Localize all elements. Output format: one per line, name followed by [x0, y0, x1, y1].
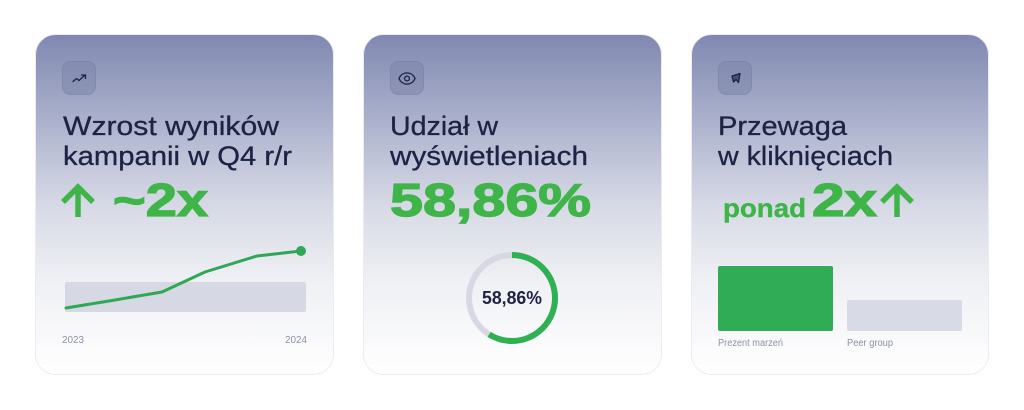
panel: impression share — [364, 34, 662, 374]
advantage value: 2x — [812, 174, 878, 226]
bar: Peer group — [847, 300, 962, 331]
advantage value — [723, 174, 878, 226]
icon: up arrow — [63, 187, 93, 217]
card background — [692, 34, 988, 374]
heading: Udział w — [390, 111, 499, 141]
card background — [364, 34, 662, 374]
share value: 58,86% — [390, 174, 591, 226]
heading: Przewaga — [718, 111, 847, 141]
label: Prezent marzeń: Prezent marzeń — [718, 338, 783, 349]
icon: trending up — [62, 62, 96, 94]
label: 2023: 2023 — [62, 335, 84, 346]
label: Peer group: Peer group — [847, 338, 893, 349]
donut chart — [469, 255, 555, 341]
growth value: ~2x — [113, 174, 209, 226]
heading: w kliknięciach — [717, 141, 893, 171]
icon: rocket — [718, 62, 752, 94]
line chart — [65, 246, 306, 312]
card background — [36, 34, 334, 374]
bar: Prezent marzeń — [718, 266, 833, 331]
heading: kampanii w Q4 r/r — [63, 141, 292, 171]
panel: click advantage — [692, 34, 988, 374]
advantage value: ponad — [723, 193, 806, 223]
heading: wyświetleniach — [389, 141, 588, 171]
icon: up arrow — [882, 187, 912, 217]
panel: campaign growth — [36, 34, 334, 374]
donut chart: 58,86% — [482, 288, 542, 308]
label: 2024: 2024 — [285, 335, 307, 346]
icon: eye — [390, 62, 424, 94]
heading: Wzrost wyników — [63, 111, 280, 141]
